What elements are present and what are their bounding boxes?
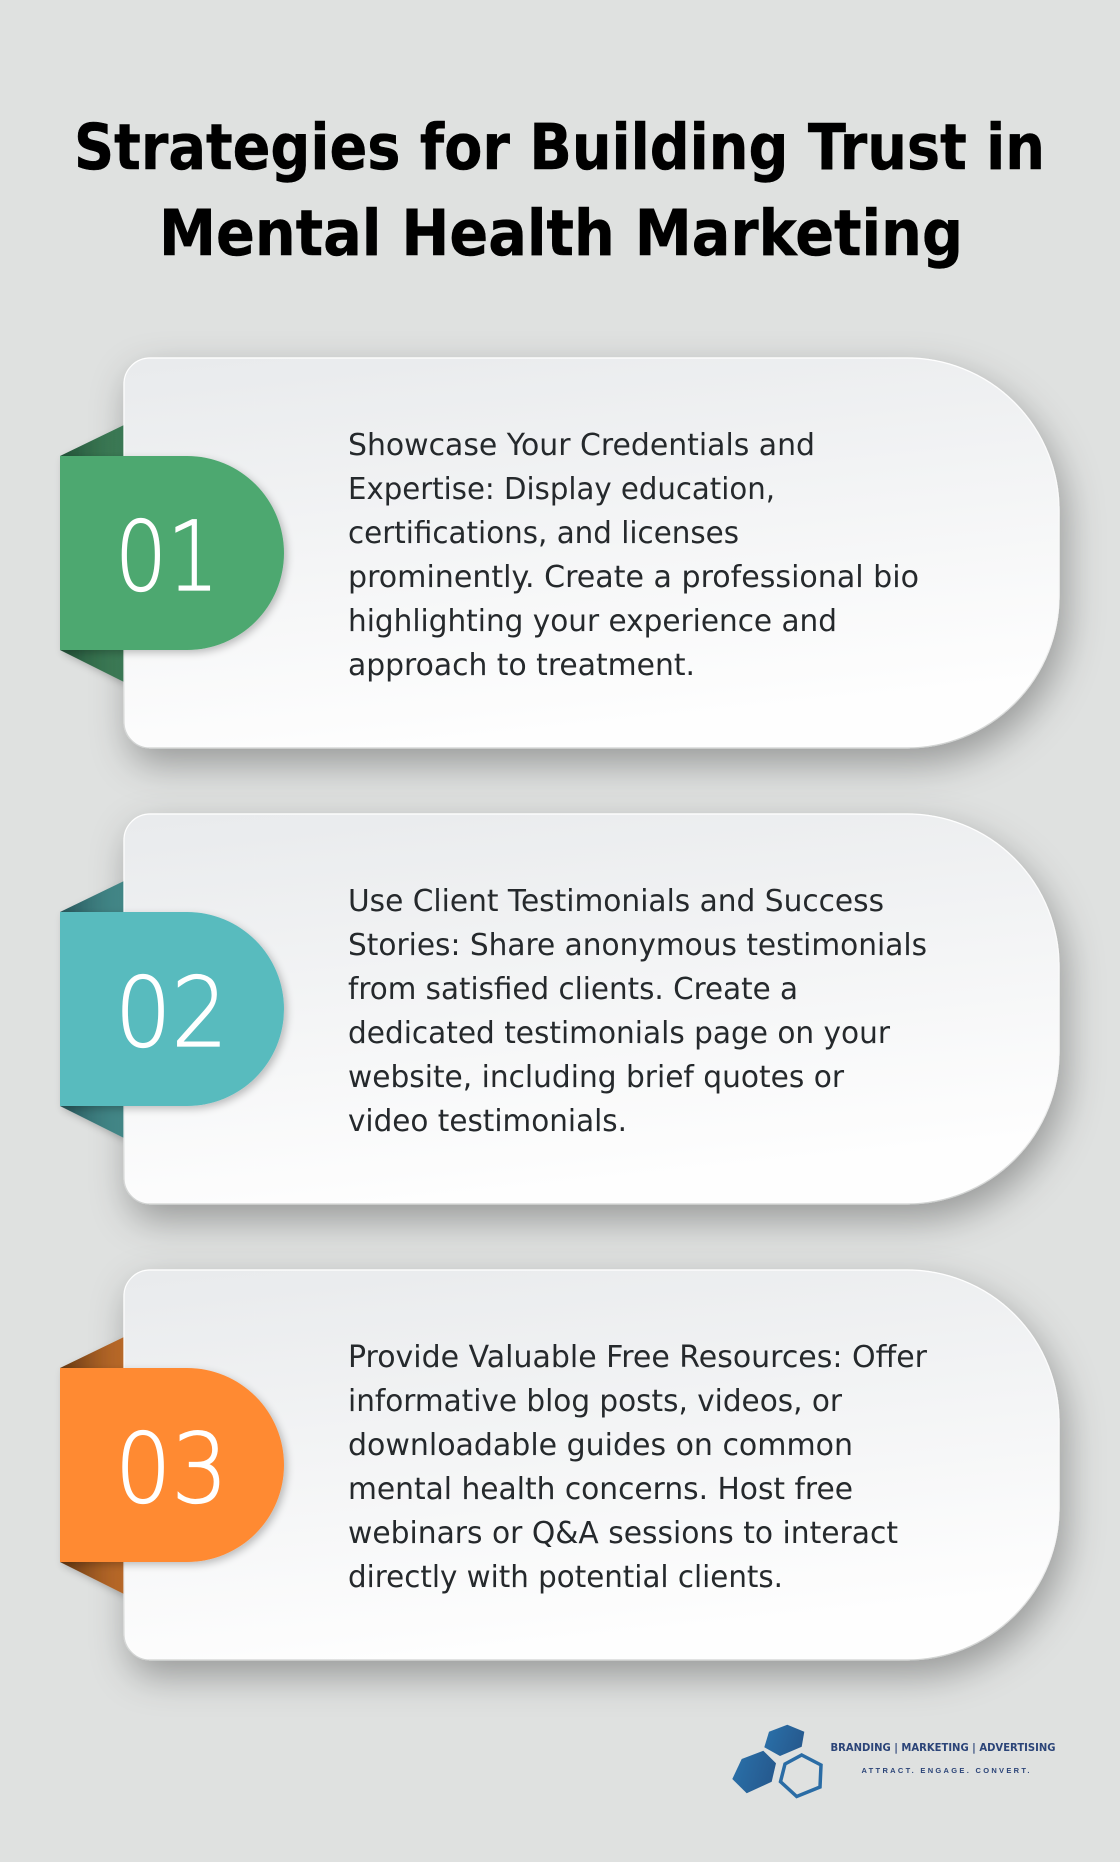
text: step 01	[348, 428, 919, 683]
ribbon fold: step 03	[60, 1337, 124, 1594]
text: step 02: video testimonials.	[348, 1104, 627, 1139]
text: step 03: directly with potential clients.	[348, 1560, 783, 1595]
panel: step 03	[60, 1270, 1059, 1660]
text: step 02: Use Client Testimonials and Success	[348, 884, 884, 919]
text: step 01: Expertise: Display education,	[348, 472, 775, 507]
title	[74, 111, 1045, 270]
brand text: BRANDING | MARKETING | ADVERTISING	[830, 1741, 1056, 1754]
ribbon fold: step 02	[60, 881, 124, 1138]
text: step 01: prominently. Create a professional bio	[348, 560, 919, 595]
text: step 03: webinars or Q&A sessions to interact	[348, 1516, 898, 1551]
logo	[732, 1725, 1056, 1796]
text: step 02: Stories: Share anonymous testimonials	[348, 928, 927, 963]
badge: 01	[60, 456, 284, 650]
title: Mental Health Marketing	[159, 197, 963, 270]
text: step 02: dedicated testimonials page on your	[348, 1016, 890, 1051]
ribbon fold: step 01	[60, 425, 124, 682]
text: step 03: informative blog posts, videos, or	[348, 1384, 842, 1419]
text: step 01: certifications, and licenses	[348, 516, 739, 551]
text: step 03	[348, 1340, 927, 1595]
text: step 02: from satisfied clients. Create a	[348, 972, 798, 1007]
card: step 03	[124, 1270, 1059, 1660]
text: step 01: highlighting your experience and	[348, 604, 837, 639]
panel: step 02	[60, 814, 1059, 1204]
card: step 01	[124, 358, 1059, 748]
icon: hexagons	[732, 1725, 821, 1796]
panel: step 01	[60, 358, 1059, 748]
badge: 01: 01	[115, 501, 219, 613]
text: step 01: Showcase Your Credentials and	[348, 428, 815, 463]
text: step 02	[348, 884, 927, 1139]
text: step 03: Provide Valuable Free Resources: Offer	[348, 1340, 927, 1375]
badge: 02: 02	[115, 957, 228, 1069]
text: step 03: downloadable guides on common	[348, 1428, 853, 1463]
brand text: ATTRACT. ENGAGE. CONVERT.	[862, 1766, 1030, 1775]
text: step 02: website, including brief quotes or	[348, 1060, 844, 1095]
brand text	[830, 1741, 1056, 1775]
badge: 03	[60, 1368, 284, 1562]
badge: 02	[60, 912, 284, 1106]
badge: 03: 03	[115, 1413, 228, 1525]
card: step 02	[124, 814, 1059, 1204]
text: step 03: mental health concerns. Host free	[348, 1472, 853, 1507]
text: step 01: approach to treatment.	[348, 648, 695, 683]
